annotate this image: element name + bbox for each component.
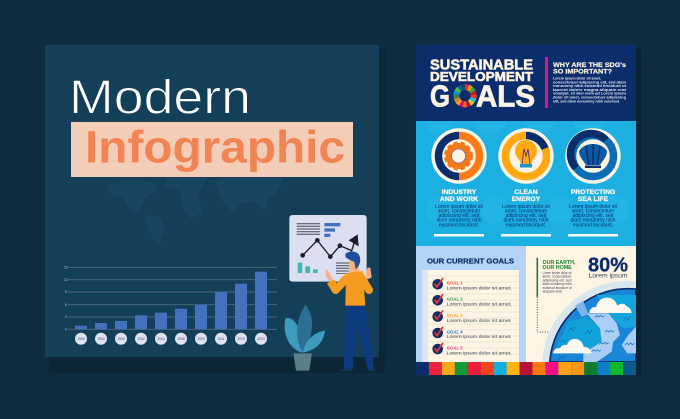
bar chart: 2019: [237, 337, 245, 341]
topic body text: euismod tincidunt.: [506, 222, 546, 228]
topic body text: adipiscing elit, sed: [439, 213, 480, 219]
goal list: Lorem ipsum dolor sit amet.: [447, 334, 512, 339]
topic body text: Lorem ipsum dolor sit: [435, 204, 484, 210]
bar chart: 2023: [257, 337, 265, 341]
header subheading: SO IMPORTANT?: [553, 68, 612, 76]
topic body text: Lorem ipsum dolor sit: [502, 204, 551, 210]
pink divider: [545, 57, 548, 108]
topic headings: AND WORK: [440, 196, 478, 203]
title: Infographic: Infographic: [85, 122, 345, 172]
bar chart: 3: [65, 315, 67, 319]
header body text: nonummy nibh euismod tincidunt ut: [553, 84, 627, 88]
illustration: presentation board: [289, 215, 367, 282]
goal list: GOAL 3: [447, 313, 463, 318]
current goals panel: [416, 246, 526, 363]
illustration: earth with clouds: [542, 281, 636, 362]
goal list: GOAL 4: [447, 329, 463, 334]
bar chart: 9: [65, 290, 67, 294]
poster header: [416, 45, 636, 121]
topic body text: adipiscing elit, sed: [506, 213, 547, 219]
goal list: GOAL 5: [447, 346, 463, 350]
icon: SDG colour wheel: [456, 87, 474, 104]
header title: ALS: [476, 78, 535, 114]
goal list: GOAL 2: [447, 297, 463, 302]
title: Modern: Modern: [69, 72, 251, 124]
header title: G: [430, 78, 450, 114]
earth body text: diam nonummy nibh: [542, 282, 572, 286]
topic headings: [440, 189, 615, 203]
green accent bar: [536, 258, 538, 297]
header title: DEVELOPMENT: [430, 70, 533, 84]
topic body text: diam nonummy nibh: [570, 218, 616, 224]
goal list: [447, 280, 512, 355]
statistic: 80%: 80%: [588, 255, 628, 277]
header subheading: WHY ARE THE SDG's: [553, 62, 627, 69]
earth body text: Lorem ipsum dolor sit: [542, 271, 572, 275]
goal list: Lorem ipsum dolor sit amet.: [447, 318, 512, 323]
bar chart: 6: [65, 303, 67, 307]
goals heading: OUR CURRENT GOALS: [427, 256, 514, 266]
dotted connector: [537, 297, 553, 332]
goal checks: [432, 278, 443, 354]
earth heading: OUR EARTH,: [542, 260, 576, 266]
bar chart: 2004: [157, 337, 165, 341]
bar chart: 1910: [97, 337, 105, 341]
topic body text: adipiscing elit, sed: [573, 213, 614, 219]
earth body text: [542, 271, 572, 294]
goal list: Lorem ipsum dolor sit amet.: [447, 302, 512, 306]
topic body text: euismod tincidunt.: [439, 222, 479, 228]
header body text: consectetuer adipiscing elit, sed diam: [553, 80, 627, 84]
header title: [430, 56, 535, 114]
header body text: Lorem ipsum dolor sit amet,: [553, 76, 601, 80]
header body text: volutpat. Ut wisi enim ad Lorem ipsum: [553, 92, 627, 96]
SDG colour strip: [416, 362, 636, 375]
topic body text: diam nonummy nibh: [436, 218, 482, 224]
earth body text: amet, consectetuer: [542, 275, 572, 279]
icon: sea life shell ring: [565, 128, 621, 184]
bar chart: 0: [65, 328, 67, 332]
topic headings: ENERGY: [512, 196, 541, 203]
goal list: Lorem ipsum dolor sit amet.: [447, 285, 512, 290]
statistic caption: Lorem ipsum: [588, 274, 628, 280]
icon: industry gear ring: [431, 128, 487, 184]
title highlight box: [71, 122, 353, 177]
bar chart: 2008: [177, 337, 185, 341]
topic body text: euismod tincidunt.: [573, 222, 613, 228]
panel: modern infographic card: [45, 45, 379, 357]
our earth panel: [526, 246, 636, 363]
header body text: dolor sit amet, consectetuer adipiscing: [553, 96, 626, 100]
header body text: elit, sed diam nonummy nibh euismod.: [553, 99, 620, 103]
lined notepaper: [422, 270, 519, 363]
goal list: Lorem ipsum dolor sit amet.: [447, 350, 512, 355]
illustration: person pointing at board: [325, 252, 375, 371]
blue section: goal topics: [416, 121, 636, 246]
bar chart: 2009: [197, 337, 205, 341]
bar chart: 2002: [137, 337, 145, 341]
cloud lower: [553, 339, 592, 353]
bar chart: 1900: [77, 337, 85, 341]
earth body text: adipiscing elit, sed: [542, 278, 572, 282]
bar chart: 1930: [117, 337, 125, 341]
earth body text: aliquam erat.: [542, 290, 562, 294]
world map watermark: [108, 169, 284, 245]
header body text: laoreet dolore magna aliquam erat: [553, 88, 627, 92]
white rules: [434, 234, 618, 236]
topic body text: amet, consectetuer: [572, 209, 615, 215]
illustration: plant in pot: [285, 305, 325, 371]
topic headings: INDUSTRY: [442, 189, 477, 196]
topic headings: PROTECTING: [571, 189, 615, 196]
header body text: [553, 76, 627, 103]
bar chart: [64, 266, 277, 345]
bar chart: 15: [64, 266, 68, 270]
earth body text: euismod tincidunt ut: [542, 286, 572, 290]
cloud upper: [589, 298, 632, 313]
topic body text: diam nonummy nibh: [503, 218, 549, 224]
header subheading: [553, 62, 627, 76]
earth heading: OUR HOME: [542, 265, 572, 271]
topic body text: amet, consectetuer: [438, 209, 481, 215]
topic body text: [435, 204, 618, 228]
goal list: GOAL 1: [447, 280, 463, 286]
topic headings: SEA LIFE: [578, 196, 609, 203]
topic body text: Lorem ipsum dolor sit: [569, 204, 618, 210]
topic body text: amet, consectetuer: [505, 209, 548, 215]
bar chart: 2011: [217, 337, 225, 341]
icon: clean energy bulb ring: [498, 128, 554, 184]
panel: sustainable development goals poster: [416, 45, 636, 375]
topic headings: CLEAN: [514, 189, 538, 196]
bar chart: 12: [64, 278, 68, 282]
earth heading: [542, 260, 576, 271]
header title: SUSTAINABLE: [430, 56, 533, 74]
